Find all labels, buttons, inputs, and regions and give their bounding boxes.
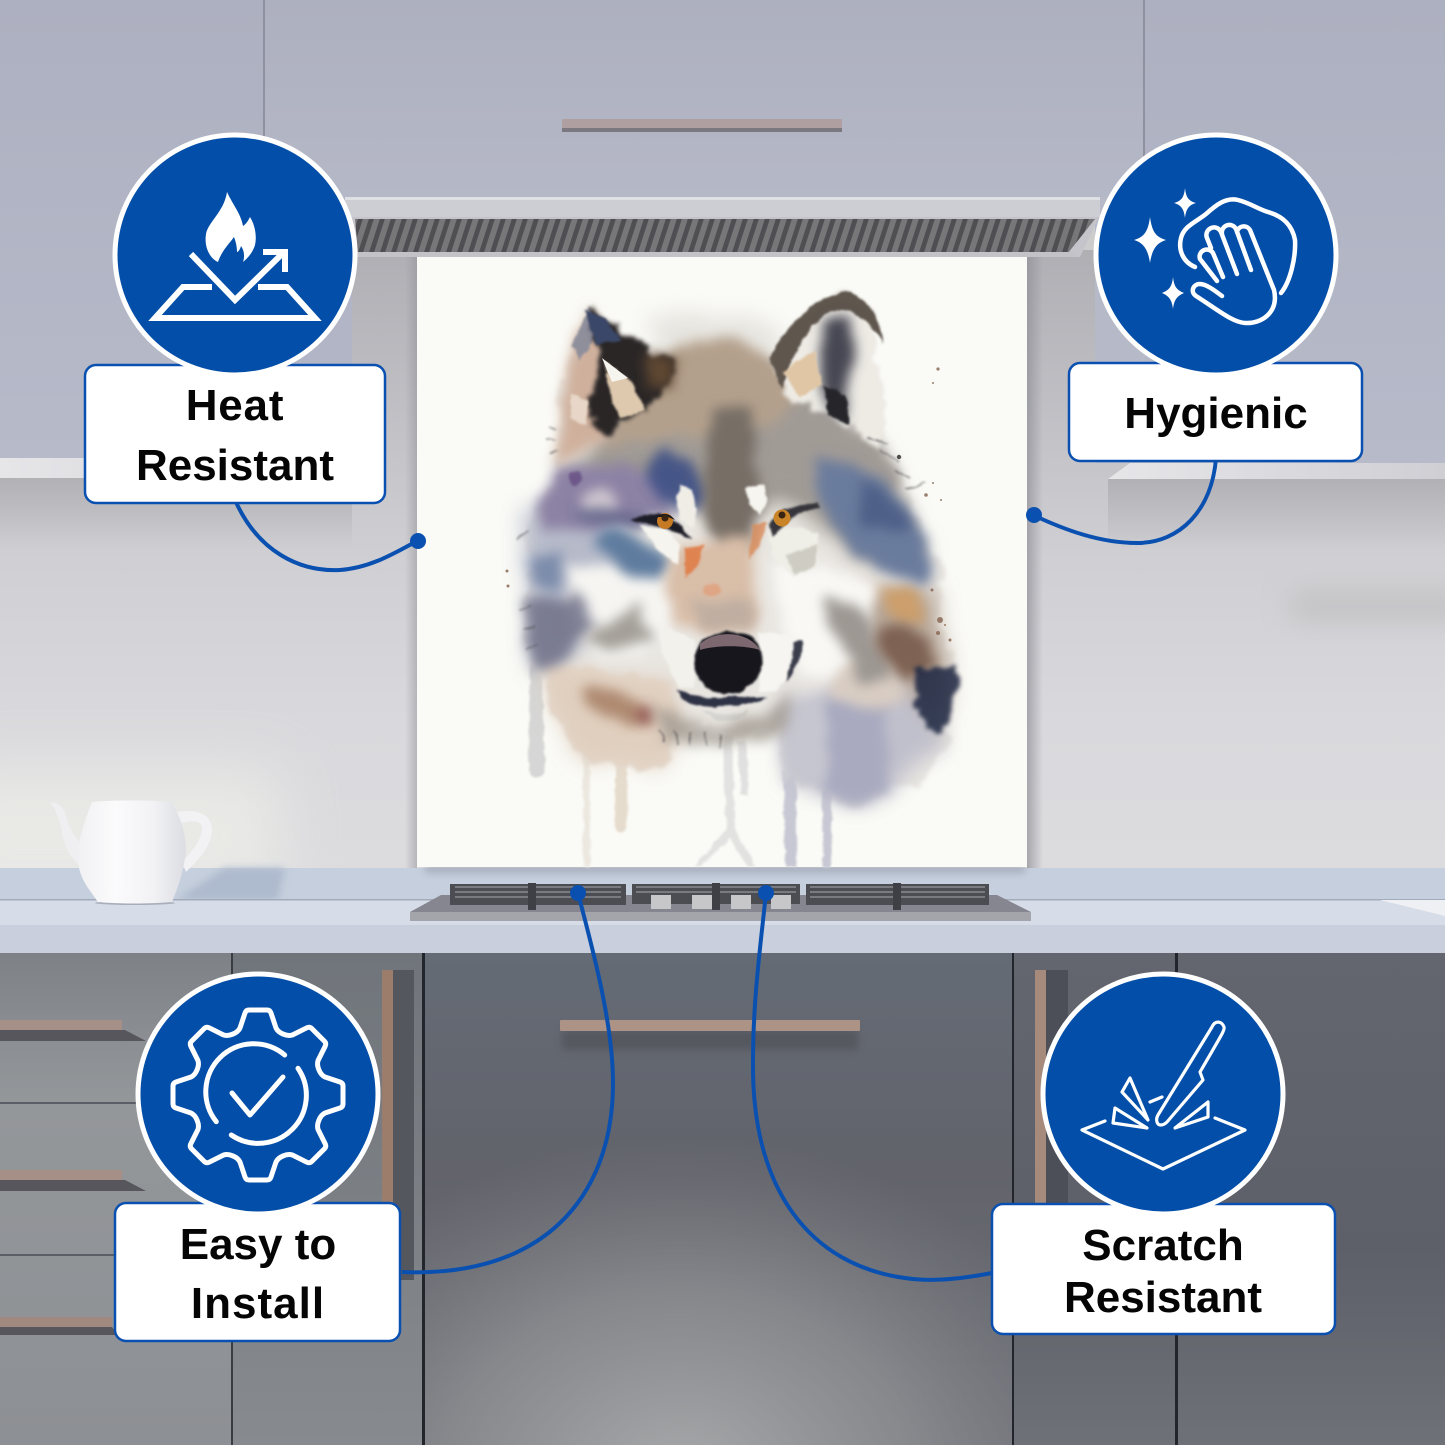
orange marks xyxy=(684,545,704,578)
label box xyxy=(1069,363,1362,461)
peach shoulder xyxy=(830,650,910,710)
drawer handles xyxy=(0,1020,146,1335)
underlay: right side xyxy=(850,585,950,740)
right brow blue xyxy=(815,462,935,585)
cabinet handle xyxy=(562,119,842,128)
right cheek grey patch xyxy=(822,596,892,680)
lower cabinets xyxy=(0,953,1445,1445)
right ear xyxy=(768,291,884,449)
panel drop shadow xyxy=(425,864,1025,873)
right brown patch xyxy=(880,624,940,680)
underlay: left face wash xyxy=(525,490,620,675)
snout peach xyxy=(668,535,756,635)
left jaw grey xyxy=(522,595,600,670)
circle badge xyxy=(138,974,378,1214)
chin fur xyxy=(650,690,790,745)
upper cabinet: left xyxy=(0,0,264,458)
brown streak xyxy=(580,687,652,726)
forehead brown top xyxy=(605,338,800,445)
right eye patch xyxy=(768,527,818,577)
teapot xyxy=(50,800,212,905)
label text: Hygienic xyxy=(1124,389,1308,438)
connector line xyxy=(235,500,426,570)
icon: hand wiping with sparkles xyxy=(1134,188,1295,323)
callout: Hygienic xyxy=(1026,135,1362,543)
underlay: lower left xyxy=(547,670,675,765)
panel paper xyxy=(417,257,1027,867)
white left cheek xyxy=(565,565,673,660)
drips xyxy=(529,665,832,867)
icon: flame on surface xyxy=(155,192,315,318)
white right cheek xyxy=(772,560,878,680)
muzzle sides white xyxy=(660,625,695,688)
label text: Install: Install xyxy=(191,1279,325,1328)
gas hob xyxy=(410,883,1031,921)
shelf ledge left xyxy=(0,458,352,478)
icon: knife scratching surface xyxy=(1082,1022,1245,1169)
connector line xyxy=(753,885,992,1280)
fur strokes xyxy=(517,427,925,748)
pale wash behind head xyxy=(650,314,775,370)
connector line xyxy=(1026,458,1216,543)
label text: Heat: Heat xyxy=(186,381,284,430)
wolf illustration xyxy=(506,291,957,867)
centre door handle xyxy=(560,1020,860,1050)
circle badge xyxy=(115,135,355,375)
left ear xyxy=(557,306,677,465)
forehead grey xyxy=(600,370,905,500)
right eye xyxy=(774,510,790,526)
left under-eye blue xyxy=(592,529,672,578)
label text: Resistant: Resistant xyxy=(136,441,334,490)
label box xyxy=(992,1204,1335,1334)
circle badge xyxy=(1043,974,1283,1214)
lower left brown wash xyxy=(547,664,680,769)
callout: Heat Resistant xyxy=(85,135,426,570)
callout: Scratch Resistant xyxy=(753,885,1335,1334)
extractor hood xyxy=(345,197,1100,257)
icon: gear with check xyxy=(173,1010,343,1180)
circle badge xyxy=(1096,135,1336,375)
red mark xyxy=(634,705,652,725)
wall xyxy=(0,250,1445,875)
mouth xyxy=(676,640,803,721)
label box xyxy=(115,1203,400,1341)
centre bridge xyxy=(705,405,760,555)
underlay: upper head xyxy=(565,370,925,560)
left eye patch xyxy=(640,525,680,565)
white brow tufts xyxy=(676,484,697,528)
head base wash xyxy=(517,291,957,810)
vertical door handle right xyxy=(1035,970,1068,1210)
wolf artwork panel xyxy=(417,257,1027,867)
eye liner left xyxy=(630,513,692,540)
left purple wash xyxy=(540,462,672,530)
navy speckle xyxy=(913,668,957,735)
worktop xyxy=(0,868,1445,953)
underlay: lower right xyxy=(785,680,945,805)
label text: Easy to: Easy to xyxy=(180,1220,336,1269)
left eye xyxy=(657,513,673,529)
nose xyxy=(694,632,762,694)
label text: Scratch: Scratch xyxy=(1082,1221,1244,1270)
shelf ledge right xyxy=(1108,463,1445,479)
paint splatter xyxy=(506,367,952,642)
right ochre patch xyxy=(880,588,928,625)
label box xyxy=(85,365,385,503)
upper cabinet: centre xyxy=(265,0,1143,197)
lower right lilac wash xyxy=(824,695,888,808)
vertical door handle left xyxy=(382,970,414,1280)
upper cabinet: right xyxy=(1145,0,1445,463)
eye liner right xyxy=(770,502,820,538)
left brow navy xyxy=(648,448,708,509)
callout: Easy to Install xyxy=(115,885,613,1341)
label text: Resistant: Resistant xyxy=(1064,1273,1262,1322)
left cheek blue xyxy=(530,555,565,590)
connector line xyxy=(402,885,613,1272)
